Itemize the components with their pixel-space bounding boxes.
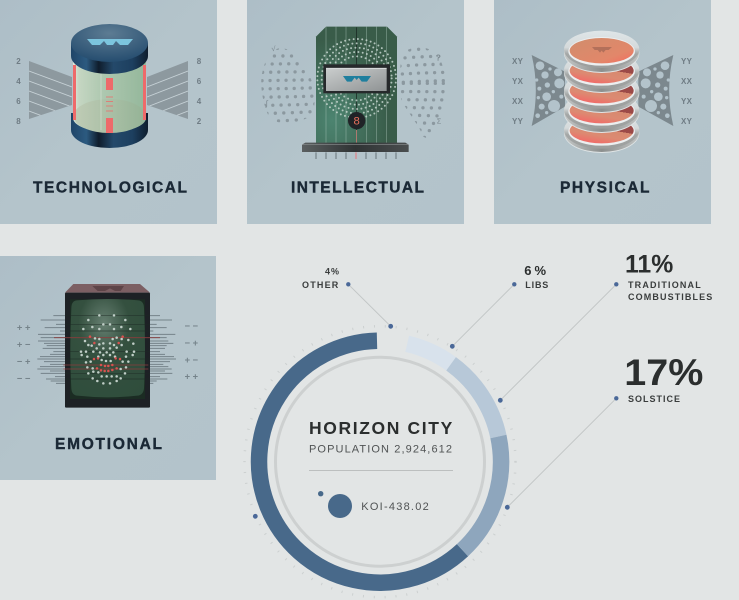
icon: monitor <box>17 284 199 408</box>
left marker dot <box>253 514 258 519</box>
left dot wing <box>261 48 314 122</box>
panel: emotional <box>0 256 216 480</box>
dish 5 <box>564 111 639 153</box>
callout: other: OTHER <box>302 280 339 290</box>
callout: libs: 6% <box>524 263 546 278</box>
callout: traditional combustibles <box>498 250 712 403</box>
callout: solstice: 17% <box>624 352 703 393</box>
callout: other: 4% <box>325 266 339 276</box>
dish 3 <box>564 71 639 113</box>
segment: libs <box>451 364 498 436</box>
segment: other light <box>407 344 451 364</box>
icon: petri dish stack: YX <box>681 97 693 106</box>
right wing scale: 2 <box>197 117 202 126</box>
right wing scale: 6 <box>197 77 202 86</box>
callout: libs <box>450 263 548 349</box>
dash labels left: + − <box>17 339 31 349</box>
icon: processor: ∫ <box>265 99 269 108</box>
dash labels left: − + <box>185 338 199 348</box>
heading: TECHNOLOGICAL <box>33 180 187 196</box>
dish 4 <box>564 91 639 133</box>
icon: petri dish stack: XY <box>681 117 693 126</box>
callout: traditional combustibles: 11% <box>625 250 673 278</box>
donut chart <box>244 326 516 597</box>
panel: physical <box>494 0 711 224</box>
callout: solstice: SOLSTICE <box>628 394 680 404</box>
left wing scale <box>16 57 72 127</box>
dash labels left: − − <box>185 321 199 331</box>
segment: traditional <box>462 436 501 550</box>
dish 2 <box>564 51 639 93</box>
right wing scale: 4 <box>197 97 202 106</box>
icon: processor: √ <box>271 44 276 53</box>
dash labels left: + + <box>17 322 31 332</box>
callout: traditional combustibles: COMBUSTIBLES <box>628 292 712 302</box>
planet name: KOI-438.02 <box>361 501 429 513</box>
callout: libs: LIBS <box>525 280 548 290</box>
right lattice wing <box>638 55 673 126</box>
right wing scale: 8 <box>197 57 202 66</box>
icon: petri dish stack <box>512 31 693 153</box>
icon: petri dish stack: YY <box>681 57 693 66</box>
icon: petri dish stack: XY <box>512 57 524 66</box>
dash labels left: + − <box>185 355 199 365</box>
callout: other <box>302 266 393 329</box>
red scan lines <box>65 316 150 379</box>
segment: largest dark <box>259 341 462 583</box>
callout: traditional combustibles: TRADITIONAL <box>628 280 701 290</box>
icon: processor: Σ <box>437 117 442 126</box>
population: POPULATION 2,924,612 <box>309 443 452 455</box>
dish 1 <box>564 31 639 73</box>
right wing scale <box>147 57 202 127</box>
icon: processor <box>262 0 451 178</box>
face dots <box>80 314 135 385</box>
dash labels left: − − <box>17 373 31 383</box>
panel: technological <box>0 0 217 224</box>
dash labels left: − + <box>17 356 31 366</box>
left wing scale: 4 <box>16 77 21 86</box>
heading: INTELLECTUAL <box>291 180 424 196</box>
signal lines <box>37 316 176 383</box>
dash labels left <box>17 321 199 383</box>
heading: PHYSICAL <box>560 180 650 196</box>
icon: cylinder <box>71 24 148 148</box>
left lattice wing <box>532 55 565 126</box>
inner ring <box>276 357 484 566</box>
heading: EMOTIONAL <box>55 436 162 453</box>
icon: processor: ? <box>436 53 441 63</box>
callout: solstice <box>505 352 703 510</box>
left wing scale: 6 <box>16 97 21 106</box>
icon: petri dish stack: XX <box>512 97 524 106</box>
right dot wing <box>400 48 445 138</box>
left wing scale: 8 <box>16 117 21 126</box>
icon: petri dish stack: XX <box>681 77 693 86</box>
tick marks <box>244 326 516 597</box>
icon: petri dish stack: YX <box>512 77 524 86</box>
icon: petri dish stack: YY <box>512 117 524 126</box>
centre title: HORIZON CITY <box>309 418 453 438</box>
icon: processor: 8 <box>354 116 360 128</box>
icon: logo <box>87 39 133 45</box>
left wing scale: 2 <box>16 57 21 66</box>
panel: intellectual <box>247 0 464 224</box>
dash labels left: + + <box>185 372 199 382</box>
planet marker <box>318 491 352 518</box>
